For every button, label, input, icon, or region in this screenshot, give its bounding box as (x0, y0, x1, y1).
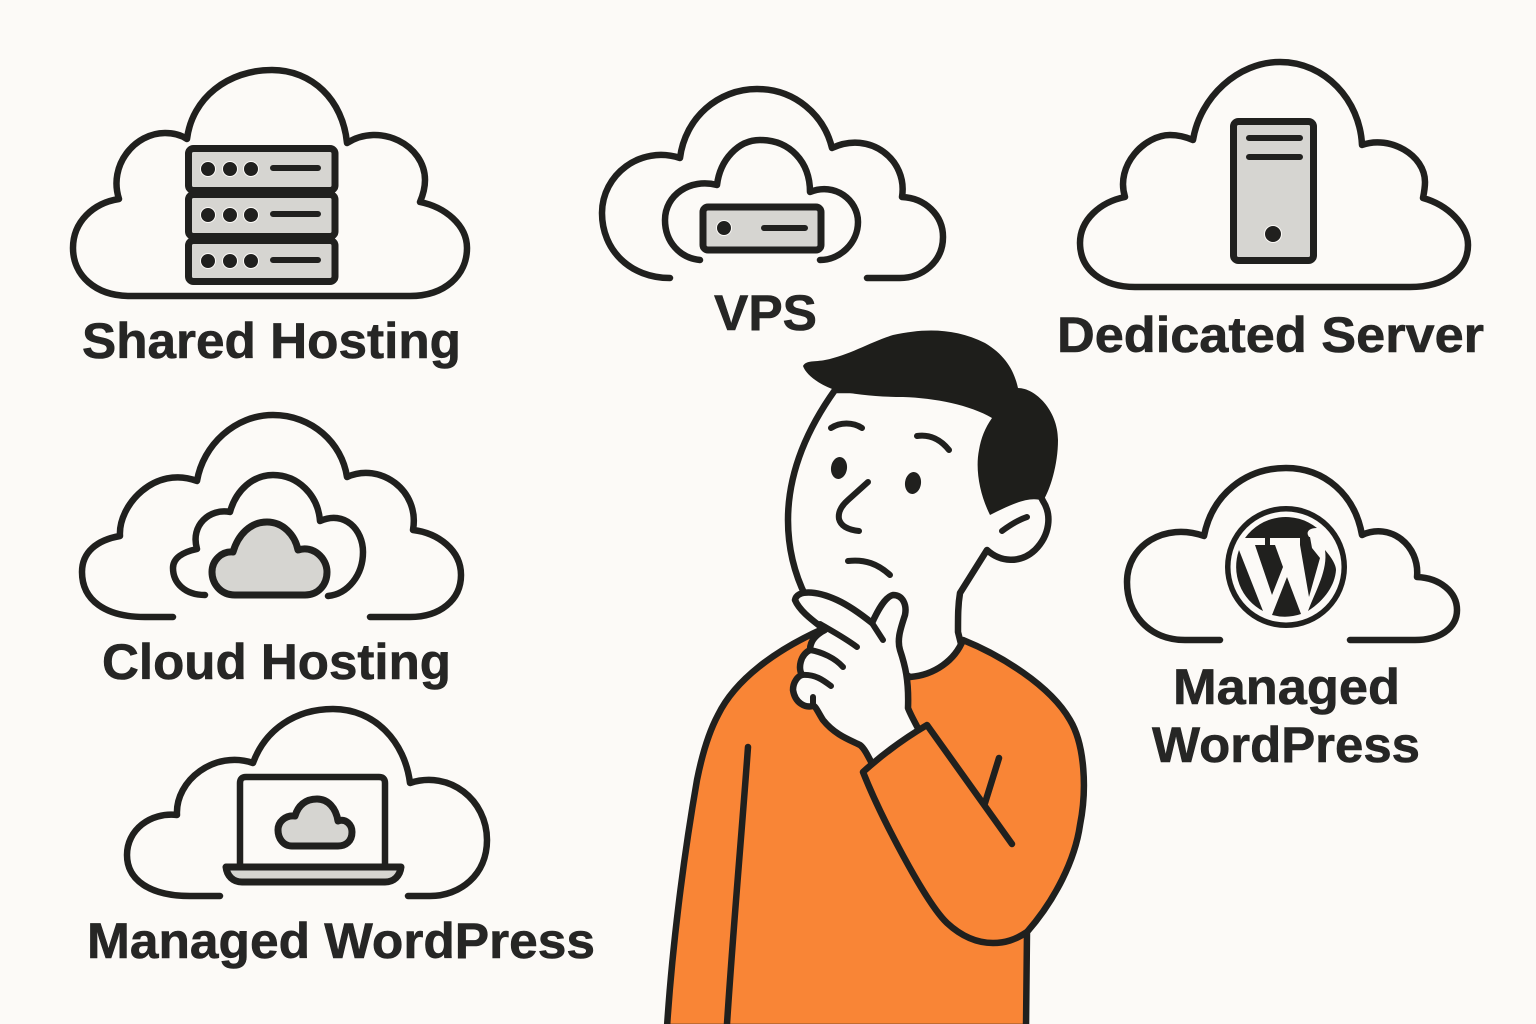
eyebrows (831, 424, 949, 450)
panel: managed wordpress laptop (87, 709, 595, 969)
icon: server rack (188, 148, 335, 282)
icon: shared hosting cloud outline (73, 70, 467, 296)
label: managed wordpress two lines: WordPress (1152, 717, 1420, 773)
icon: wordpress cloud outline (1127, 468, 1457, 640)
panel: managed wordpress logo (1127, 468, 1457, 773)
label: dedicated server: Dedicated Server (1057, 307, 1484, 363)
panel: shared hosting (73, 70, 467, 369)
label: managed wordpress two lines (1152, 659, 1420, 773)
sweater (667, 628, 1084, 1024)
icon: tower server (1234, 122, 1314, 260)
ear detail (1002, 517, 1027, 531)
icon: cloud hosting outline (82, 415, 461, 617)
icon: filled cloud (212, 522, 327, 595)
eyes (830, 456, 848, 480)
icon: dedicated cloud outline (1080, 62, 1468, 287)
icon: laptop (226, 777, 401, 882)
label: cloud hosting: Cloud Hosting (102, 634, 451, 690)
panel: cloud hosting (82, 415, 461, 690)
icon: wordpress logo (1225, 506, 1347, 628)
label: managed wordpress two lines: Managed (1173, 659, 1400, 715)
icon: small inner cloud (665, 140, 858, 260)
label: shared hosting: Shared Hosting (82, 313, 461, 369)
hair (803, 330, 1058, 515)
icon: inner cloud outline (173, 475, 363, 596)
icon: VPS cloud outline (602, 89, 943, 278)
icon: laptop cloud outline (127, 709, 487, 896)
nose (839, 482, 868, 531)
sleeve outline (863, 725, 1027, 943)
panel: dedicated server (1057, 62, 1484, 363)
hand (793, 592, 925, 775)
character: thinking man (667, 330, 1084, 1024)
label: managed wordpress: Managed WordPress (87, 913, 595, 969)
sleeve cuff fill (863, 725, 945, 810)
mouth (848, 561, 890, 575)
label: VPS: VPS (714, 285, 817, 341)
panel: VPS (602, 89, 943, 341)
neck and face (788, 390, 1048, 700)
icon: VPS server (703, 207, 821, 250)
sweater fold lines (727, 747, 999, 1024)
finger lines (802, 623, 883, 706)
